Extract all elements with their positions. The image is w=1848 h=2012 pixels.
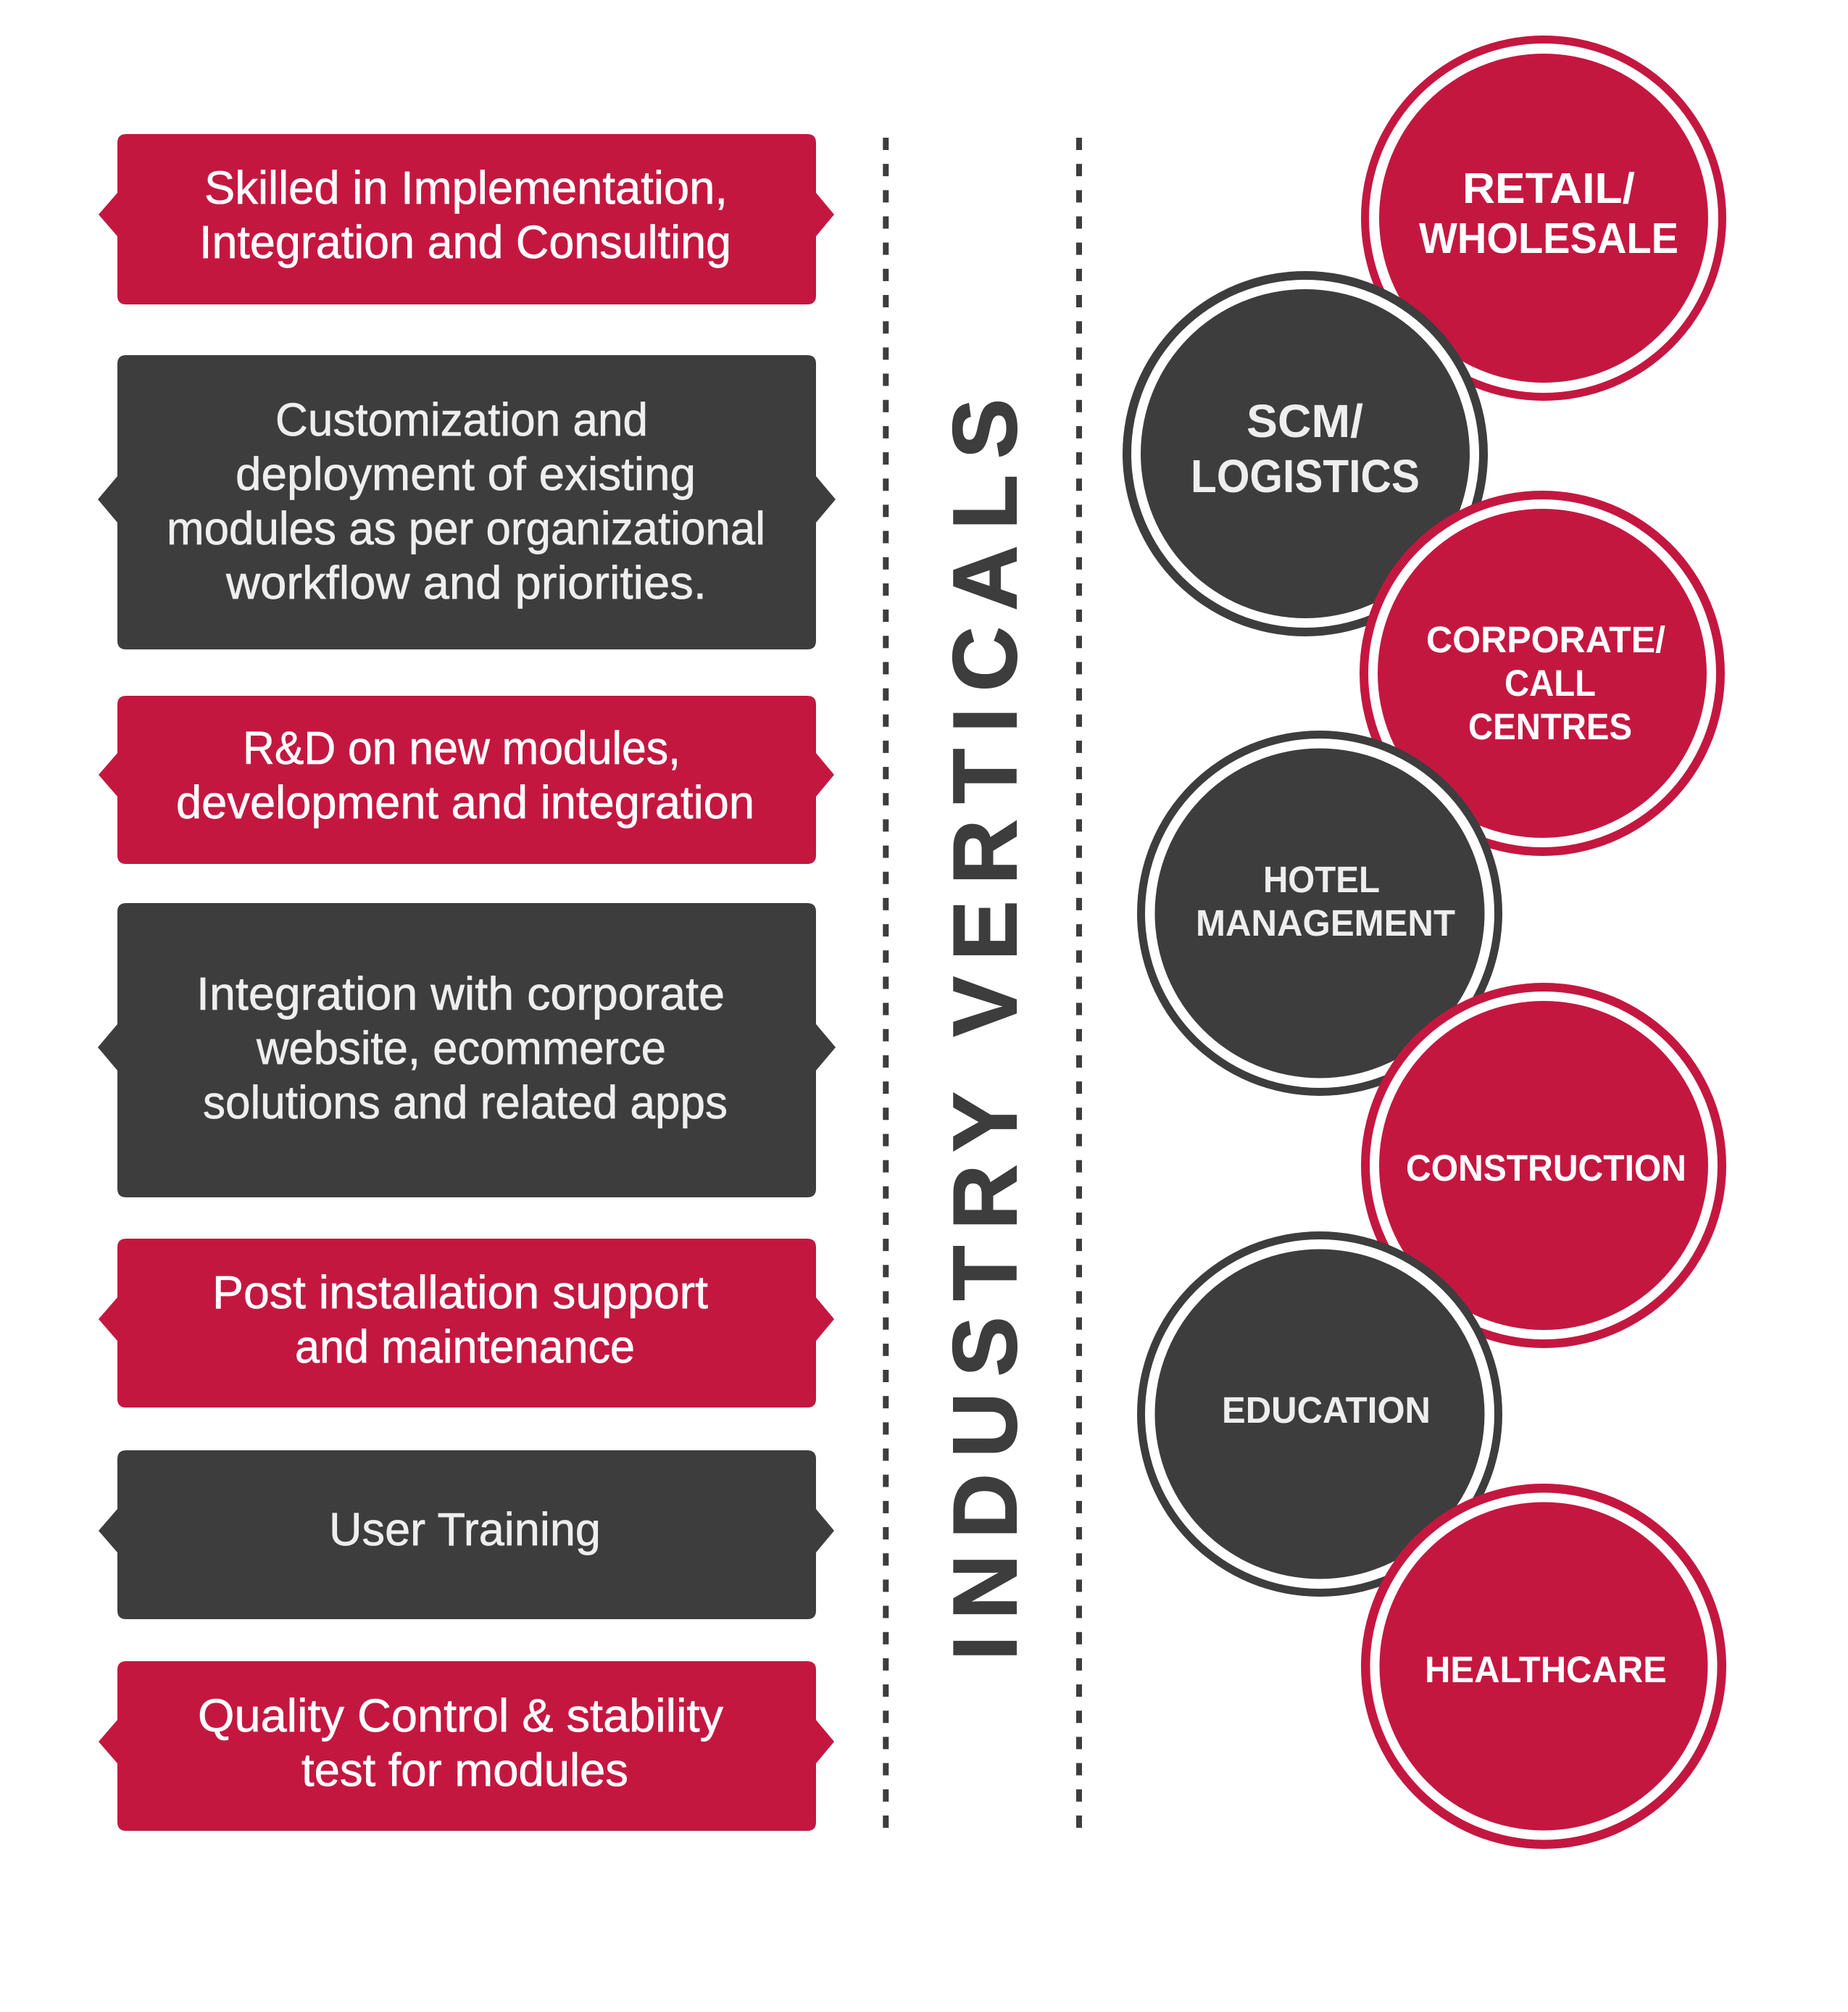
heading: industry verticals: INDUSTRY VERTICALS [936,399,1036,1660]
label: retail [1419,165,1678,262]
label: corporate: CALL [1504,662,1596,704]
panel: implementation skills [99,134,834,304]
text: integration: Integration with corporate [196,968,725,1020]
text: research and development [176,722,754,828]
text: user training: User Training [329,1503,601,1555]
label: retail: WHOLESALE [1419,215,1678,262]
label: corporate: CORPORATE/ [1426,619,1665,660]
text: quality control: Quality Control & stability [198,1689,723,1742]
text: support [212,1266,708,1373]
text: implementation skills: Integration and Consulting [199,216,731,268]
text: customization: Customization and [275,394,648,446]
circle: retail [1361,36,1726,401]
label: construction: CONSTRUCTION [1406,1147,1686,1189]
label: hotel management [1196,859,1455,944]
circle: education [1137,1231,1502,1597]
text: integration: website, ecommerce [256,1022,666,1074]
text: customization: deployment of existing [236,448,696,500]
label: logistics [1191,395,1420,502]
text: implementation skills: Skilled in Implementation, [204,162,728,214]
text: implementation skills [199,162,731,268]
panel: research and development [99,696,834,864]
text: integration [196,968,728,1128]
circle: logistics [1123,271,1488,636]
panel: quality control [99,1661,834,1831]
label: healthcare: HEALTHCARE [1425,1649,1667,1690]
panel: support [99,1239,834,1408]
text: research and development: development and integration [176,776,754,828]
text: research and development: R&D on new modules, [243,722,680,774]
label: logistics: SCM/ [1246,395,1363,447]
text: customization: modules as per organizational [167,502,765,554]
panel: user training [99,1450,834,1619]
label: retail: RETAIL/ [1462,165,1635,212]
label: hotel management: MANAGEMENT [1196,902,1455,944]
circle: hotel management [1137,731,1502,1096]
panel: customization [98,355,836,649]
text: integration: solutions and related apps [203,1076,728,1128]
circle: healthcare [1361,1484,1726,1849]
text: customization [167,394,765,609]
text: quality control [198,1689,723,1796]
text: support: Post installation support [212,1266,708,1318]
label: hotel management: HOTEL [1263,859,1380,900]
panel: integration [98,903,836,1197]
label: education: EDUCATION [1222,1389,1431,1431]
label: corporate: CENTRES [1468,706,1632,747]
text: quality control: test for modules [301,1744,628,1796]
text: customization: workflow and priorities. [225,557,707,609]
text: support: and maintenance [295,1321,635,1373]
circle: construction [1361,983,1726,1348]
circle: corporate [1360,491,1725,856]
label: logistics: LOGISTICS [1191,450,1420,502]
label: corporate [1426,619,1665,747]
